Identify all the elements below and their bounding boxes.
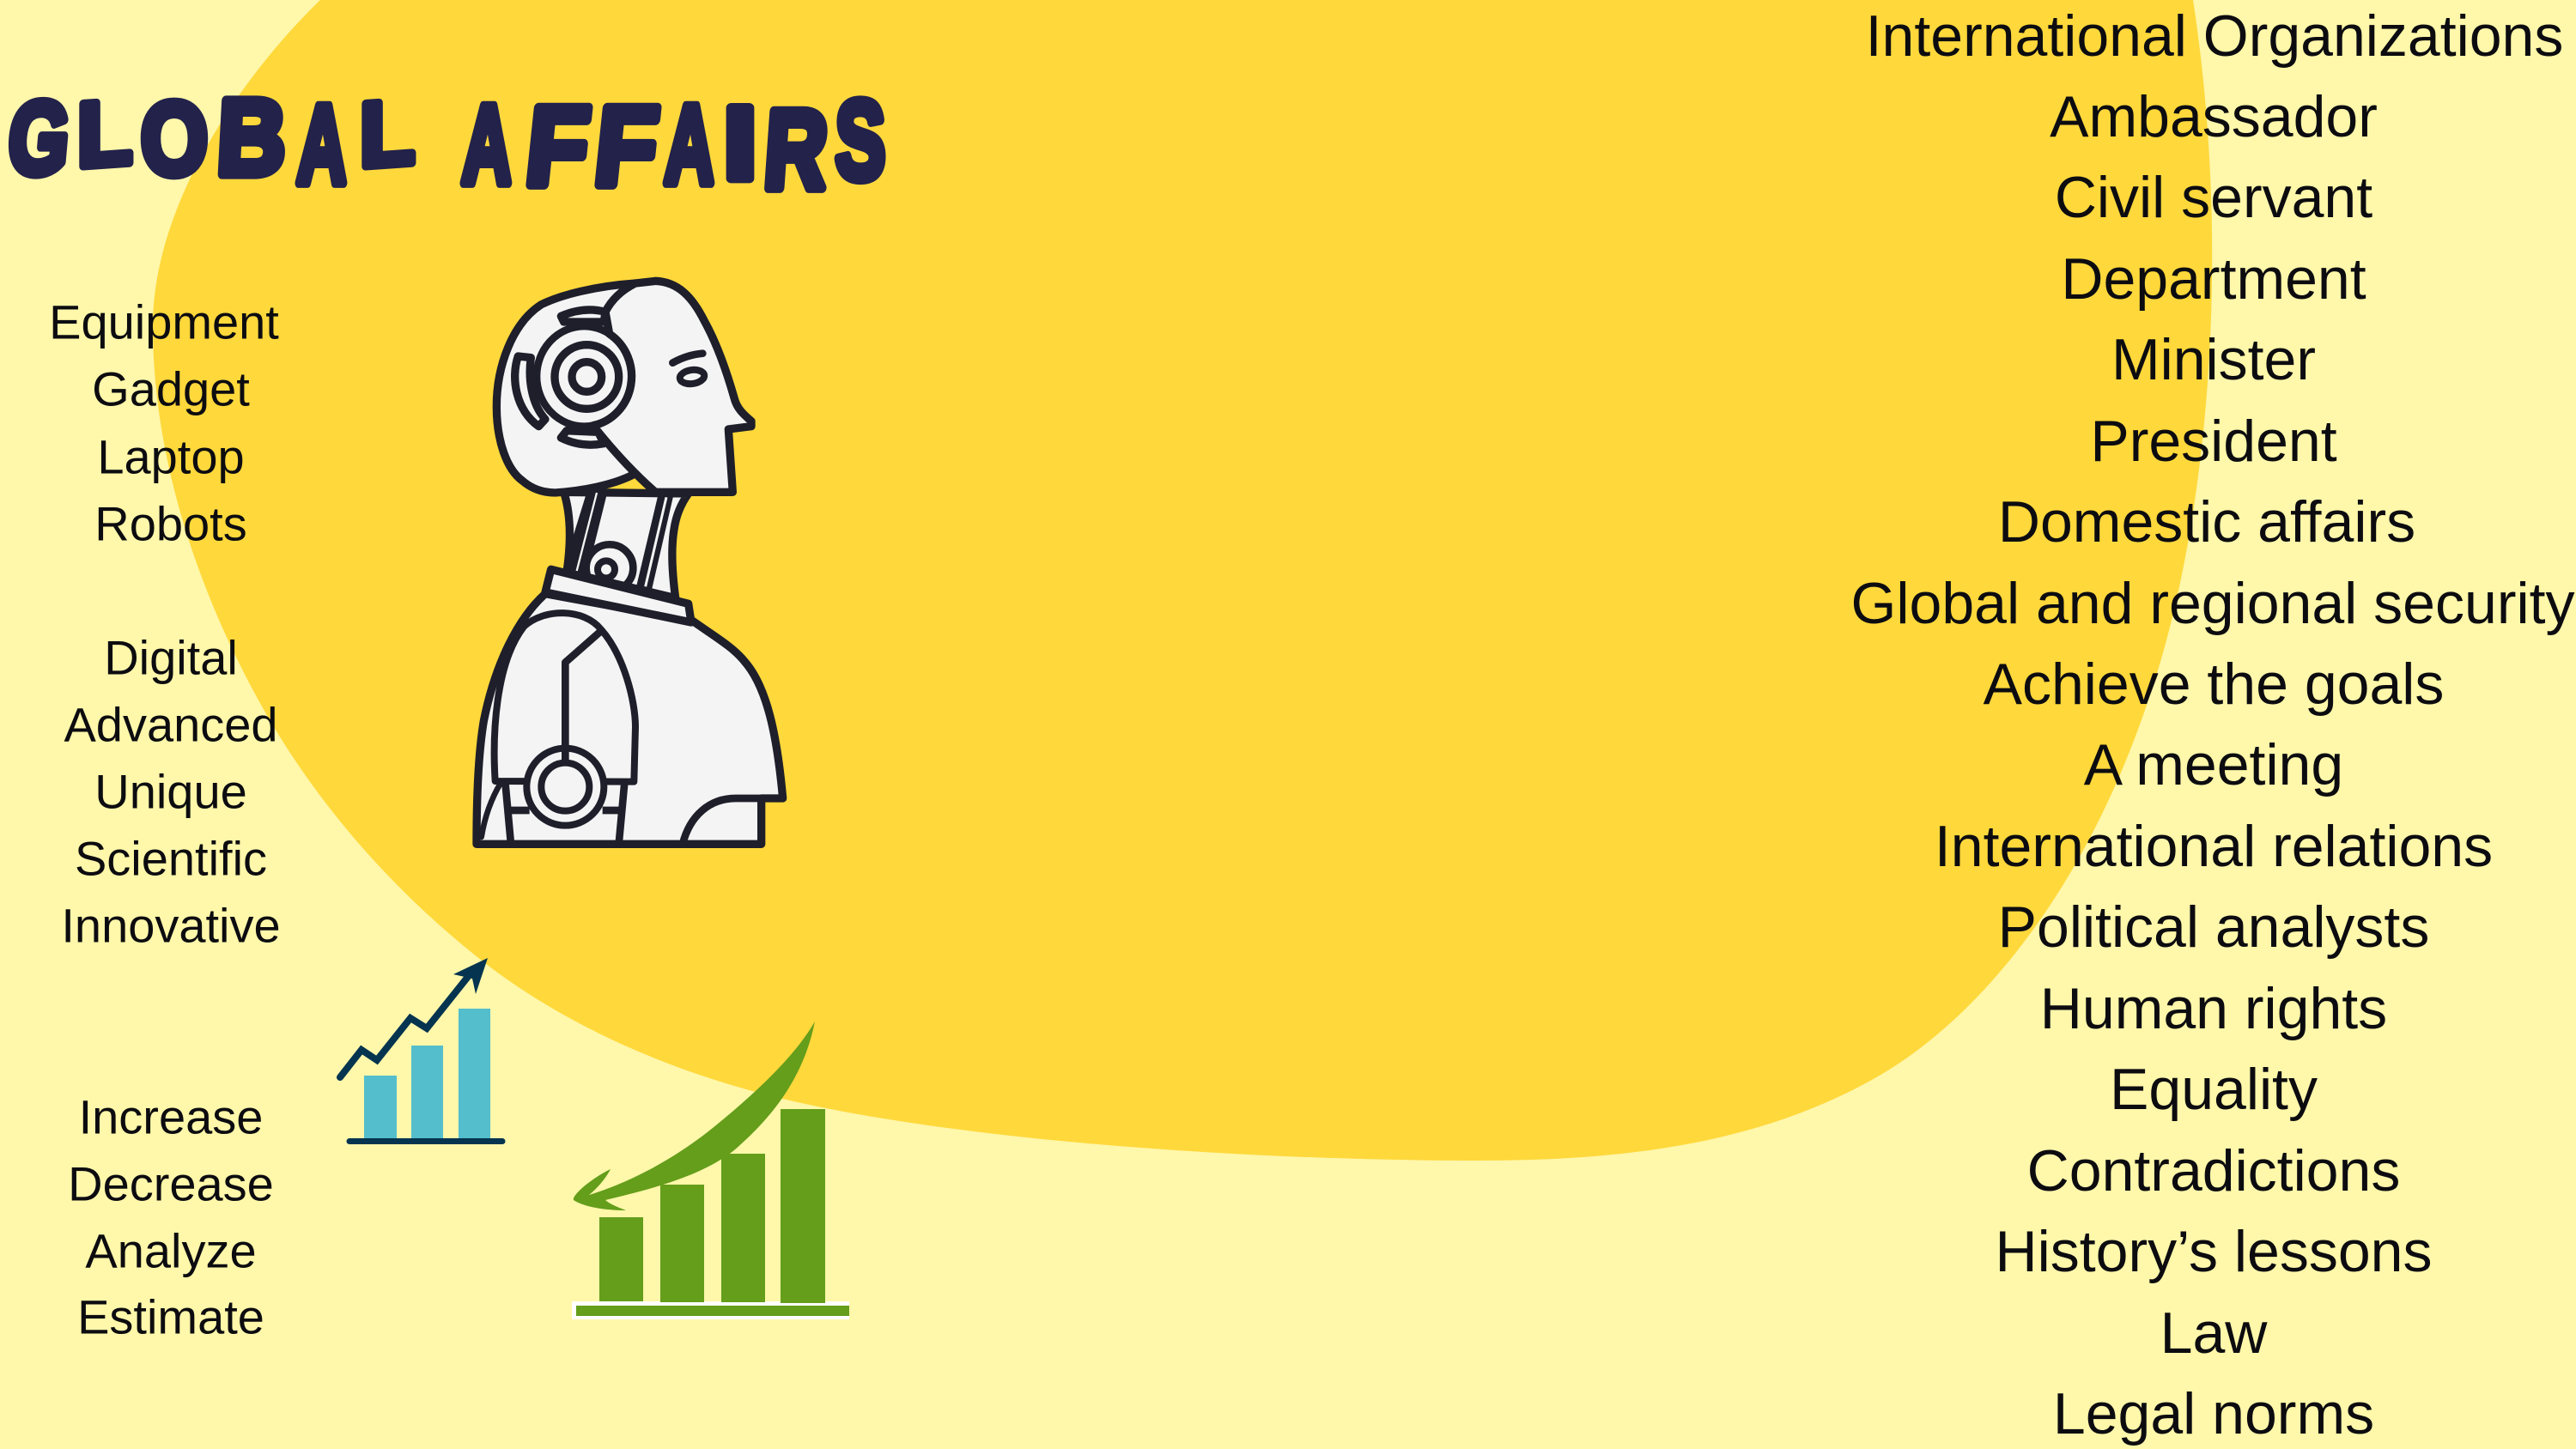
title: L [360, 81, 415, 186]
base highlight [572, 1301, 849, 1319]
icon: robot [477, 281, 783, 844]
title: I [724, 85, 756, 201]
left word list: verbs: Analyze [85, 1224, 257, 1277]
right word list: Civil servant [2055, 165, 2372, 230]
left word list: adjectives: Advanced [64, 697, 278, 752]
left word list: adjectives: Digital [104, 630, 238, 685]
right word list: A meeting [2084, 732, 2343, 797]
left word list: equipment: Robots [94, 496, 247, 551]
title: A [663, 82, 717, 207]
title: S [835, 79, 885, 203]
teal arrow head [453, 958, 488, 994]
right word list: Domestic affairs [1998, 489, 2415, 555]
right word list: Ambassador [2050, 84, 2378, 149]
teal trend arrow [340, 973, 471, 1077]
right word list: Law [2160, 1300, 2268, 1366]
right word list: Global and regional security [1851, 571, 2574, 636]
right word list: Human rights [2040, 976, 2387, 1041]
left word list: adjectives [61, 630, 281, 953]
title: A [460, 82, 514, 207]
left word list: verbs: Decrease [68, 1157, 274, 1210]
teal bars [364, 1009, 490, 1138]
right word list: Department [2061, 246, 2366, 312]
curved green arrow [574, 1022, 815, 1210]
green bars [599, 1109, 825, 1303]
title: B [215, 76, 289, 197]
left word list: adjectives: Unique [94, 764, 247, 819]
left word list: verbs: Increase [79, 1090, 263, 1143]
title: R [761, 87, 831, 212]
right word list: History’s lessons [1996, 1219, 2432, 1284]
left word list: adjectives: Scientific [75, 831, 267, 886]
right word list: Contradictions [2027, 1138, 2400, 1203]
background blob [153, 0, 2212, 1161]
teal baseline [349, 1138, 502, 1144]
title: F [590, 85, 663, 209]
left word list: verbs [68, 1090, 274, 1344]
robot neck and head [496, 281, 751, 609]
right word list: International Organizations [1866, 3, 2563, 69]
left word list: verbs: Estimate [77, 1289, 264, 1344]
title: F [521, 85, 594, 209]
chart icon: green bars with curved arrow [572, 1022, 849, 1319]
left word list: equipment [49, 295, 279, 551]
title: L [77, 81, 132, 186]
right word list: Legal norms [2053, 1381, 2374, 1446]
right word list: International relations [1935, 814, 2493, 879]
left word list: equipment: Gadget [92, 362, 250, 415]
title: O [141, 82, 208, 197]
right word list: Equality [2110, 1057, 2318, 1122]
right word list: Achieve the goals [1984, 652, 2444, 717]
left word list: adjectives: Innovative [61, 898, 281, 953]
left word list: equipment: Equipment [49, 295, 279, 349]
right word list [1851, 3, 2574, 1446]
right word list: President [2090, 409, 2337, 474]
title [4, 76, 885, 212]
right word list: Political analysts [1998, 894, 2429, 960]
right word list: Minister [2111, 327, 2316, 392]
left word list: equipment: Laptop [97, 429, 245, 484]
green baseline [576, 1306, 849, 1316]
robot torso and arm [477, 569, 783, 844]
title: A [295, 82, 349, 207]
title: G [4, 81, 74, 196]
chart icon: teal rising bars [340, 958, 502, 1142]
